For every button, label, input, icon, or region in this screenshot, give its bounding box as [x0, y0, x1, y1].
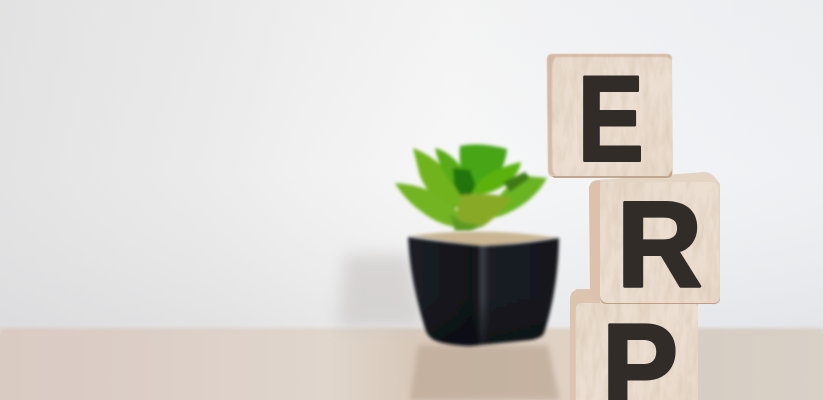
green succulent leaves: [395, 145, 547, 231]
wooden block R: [589, 172, 720, 313]
letter R: R: [617, 177, 702, 313]
letter E: E: [578, 51, 644, 187]
soil: [410, 231, 558, 248]
table surface: [0, 328, 823, 400]
black square pot: [408, 237, 559, 346]
wooden block P: [570, 289, 699, 400]
plant shadow on wall: [338, 255, 425, 328]
wooden block E: [547, 51, 674, 187]
potted plant: [338, 145, 559, 346]
